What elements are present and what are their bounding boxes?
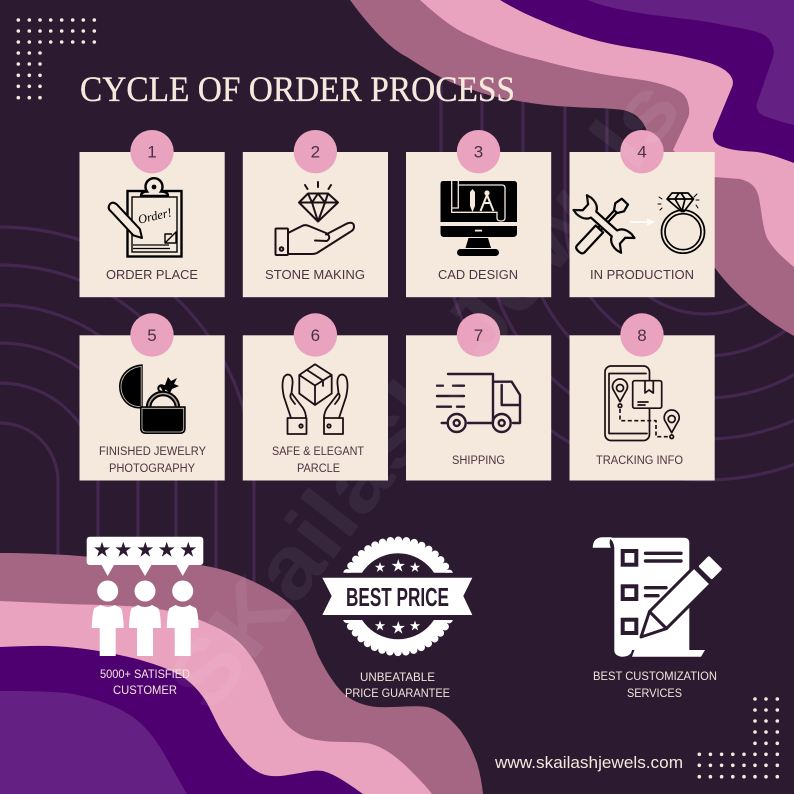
card 4: in production: 4 (637, 142, 647, 162)
icon: ring box (119, 364, 186, 434)
card 5: finished jewelry photography: PHOTOGRAPHY (109, 463, 195, 475)
card 5: finished jewelry photography (80, 313, 225, 480)
card 3: cad design: CAD DESIGN (438, 268, 518, 282)
card 8: tracking info (570, 313, 715, 480)
icon: diamond in hand (276, 182, 354, 255)
card 4: in production (570, 130, 715, 297)
feature: satisfied customers: 5000+ SATISFIED (100, 669, 190, 681)
card 8: tracking info: TRACKING INFO (596, 455, 683, 467)
card 2: stone making: STONE MAKING (265, 268, 365, 282)
feature: best customization: BEST CUSTOMIZATION (593, 671, 717, 683)
top right waves (350, 0, 794, 336)
bottom left waves (0, 553, 483, 794)
card 7: shipping: 7 (474, 326, 483, 345)
card 3: cad design (406, 130, 551, 297)
icon: checklist with pencil (593, 537, 725, 657)
card 6: safe and elegant parcel: 6 (311, 326, 320, 345)
card 7: shipping (406, 313, 551, 480)
dots: top left (16, 18, 96, 100)
icon: best price badge (322, 540, 472, 652)
card 1: order place (80, 130, 225, 297)
card 4: in production: IN PRODUCTION (590, 268, 694, 282)
feature: satisfied customers (87, 537, 203, 697)
card 5: finished jewelry photography: 5 (147, 326, 157, 345)
watermark: SKailash Jewels (148, 60, 700, 728)
icon: review bubble with stars (87, 537, 203, 576)
icon: three people (92, 580, 199, 656)
icon: diamond ring (658, 193, 704, 253)
icon: delivery truck (437, 374, 520, 432)
icon: crossed tools (573, 194, 635, 255)
arrow (630, 220, 653, 224)
icon: clipboard (109, 178, 182, 256)
card 2: stone making (243, 130, 388, 297)
card 2: stone making: 2 (311, 142, 320, 162)
feature: best price: PRICE GUARANTEE (345, 688, 450, 700)
icon: clipboard: Order! (137, 205, 173, 227)
icon: CAD monitor (440, 181, 517, 256)
feature: best price (322, 540, 472, 700)
card 1: order place: 1 (147, 142, 157, 162)
feature: satisfied customers: CUSTOMER (113, 685, 177, 697)
feature: best customization: SERVICES (627, 688, 682, 700)
card 6: safe and elegant parcel: PARCLE (297, 463, 340, 475)
dots: bottom right (698, 697, 779, 778)
card 8: tracking info: 8 (637, 326, 647, 345)
card 6: safe and elegant parcel: SAFE & ELEGANT (272, 446, 364, 458)
card 5: finished jewelry photography: FINISHED JEWELRY (99, 446, 206, 458)
icon: best price badge: BEST PRICE (346, 582, 449, 612)
feature: best price: UNBEATABLE (360, 672, 435, 684)
card 1: order place: ORDER PLACE (106, 268, 198, 282)
website url: www.skailashjewels.com (494, 754, 683, 772)
icon: phone tracking (605, 366, 679, 440)
title: CYCLE OF ORDER PROCESS (80, 69, 515, 109)
card 6: safe and elegant parcel (243, 313, 388, 480)
background arches (0, 60, 794, 590)
card 7: shipping: SHIPPING (452, 455, 505, 467)
card 3: cad design: 3 (474, 142, 483, 162)
feature: best customization (593, 537, 725, 700)
icon: hands holding box (282, 364, 348, 434)
